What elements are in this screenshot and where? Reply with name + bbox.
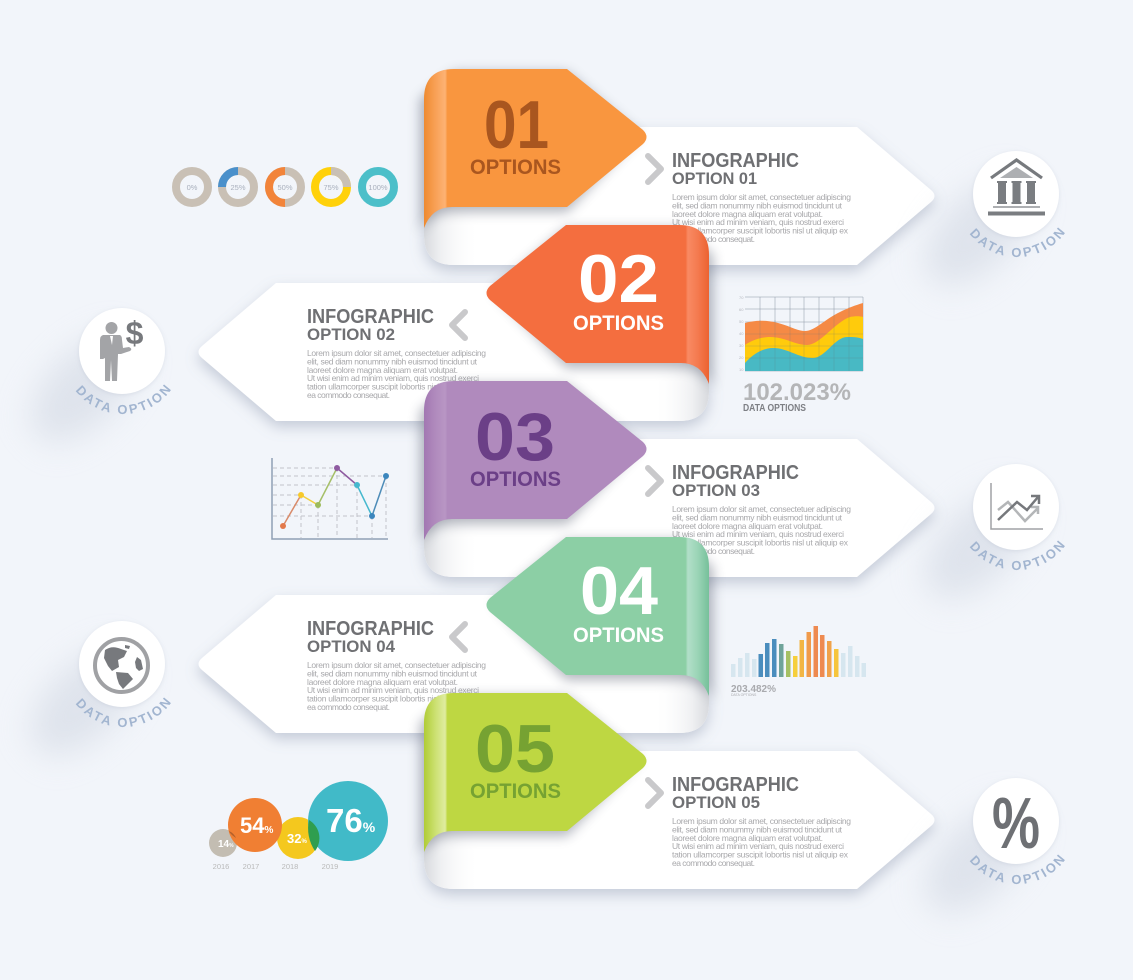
arrow body 01 (424, 127, 934, 265)
bubble label 76: 76% (326, 802, 376, 839)
step 03: arrow and tab (420, 381, 934, 577)
body text 01: laoreet dolore magna aliquam erat volutpat. (672, 209, 823, 219)
subheading 01: OPTION 01 (672, 169, 757, 188)
step 01: arrow and tab (420, 69, 934, 265)
icon: trend chart (991, 483, 1043, 529)
body text 03 (672, 504, 851, 556)
grid overlay (745, 307, 863, 371)
chevron 05 (648, 780, 661, 806)
body text 03: laoreet dolore magna aliquam erat volutpat. (672, 521, 823, 531)
body text 04: Ut wisi enim ad minim veniam, quis nostrud exerci (307, 685, 479, 695)
arrow body 03 (424, 439, 934, 577)
chevron 02 (452, 312, 465, 338)
bubble label 54: 54% (240, 813, 273, 838)
line chart points (280, 465, 389, 529)
heading 04: INFOGRAPHIC (307, 618, 434, 640)
subheading 05: OPTION 05 (672, 793, 760, 812)
body text 04: tation ullamcorper suscipit lobortis nisl ut aliquip ex (307, 694, 484, 704)
body text 01: Ut wisi enim ad minim veniam, quis nostrud exerci (672, 217, 844, 227)
bar chart caption: DATA OPTIONS (731, 693, 757, 697)
bars (731, 626, 866, 677)
body text 02: laoreet dolore magna aliquam erat volutpat. (307, 365, 458, 375)
area chart axis numbers: 10 (739, 367, 744, 372)
label: data option: DATA OPTION (76, 698, 171, 728)
body text 05: laoreet dolore magna aliquam erat volutpat. (672, 833, 823, 843)
step 04: arrow and tab (198, 537, 713, 733)
heading 05: INFOGRAPHIC (672, 774, 799, 796)
icon: businessman with dollar (100, 315, 144, 381)
area series orange (745, 303, 863, 371)
line chart axes (272, 458, 388, 539)
body text 03: Lorem ipsum dolor sit amet, consectetuer adipiscing (672, 504, 851, 514)
body text 04 (307, 660, 486, 712)
donut 50%: 50% (277, 183, 293, 192)
step 05: arrow and tab (420, 693, 934, 889)
body text 05: elit, sed diam nonummy nibh euismod tincidunt ut (672, 824, 843, 834)
body text 01: tation ullamcorper suscipit lobortis nisl ut aliquip ex (672, 226, 849, 236)
area chart axis numbers: 70 (739, 295, 744, 300)
bubble 32% (277, 817, 319, 859)
area chart axis numbers (739, 295, 744, 372)
tab label 01: OPTIONS (470, 155, 561, 179)
donut 100%: 100% (368, 183, 388, 192)
number 01: 01 (484, 87, 549, 163)
body text 03: ea commodo consequat. (672, 546, 755, 556)
donut 75% (315, 167, 351, 203)
heading 02: INFOGRAPHIC (307, 306, 434, 328)
donut 50% (265, 167, 301, 207)
area chart caption: DATA OPTIONS (743, 403, 806, 414)
body text 03: Ut wisi enim ad minim veniam, quis nostrud exerci (672, 529, 844, 539)
arrow body 02 (198, 283, 709, 421)
chevron 03 (648, 468, 661, 494)
body text 01: ea commodo consequat. (672, 234, 755, 244)
icon badge: globe (30, 621, 171, 756)
tab 05 (420, 693, 646, 889)
line chart (272, 458, 389, 539)
body text 02: tation ullamcorper suscipit lobortis nisl ut aliquip ex (307, 382, 484, 392)
body text 02: ea commodo consequat. (307, 390, 390, 400)
body text 05 (672, 816, 851, 868)
chevron 01 (648, 156, 661, 182)
label: data option: DATA OPTION (970, 540, 1065, 570)
line chart series (283, 468, 386, 526)
arrow body 05 (424, 751, 934, 889)
donut 100% (362, 171, 394, 203)
donut 0%: 0% (187, 183, 198, 192)
body text 04: elit, sed diam nonummy nibh euismod tincidunt ut (307, 668, 478, 678)
body text 05: ea commodo consequat. (672, 858, 755, 868)
body text 04: laoreet dolore magna aliquam erat volutpat. (307, 677, 458, 687)
body text 02 (307, 348, 486, 400)
number 03: 03 (475, 399, 555, 475)
bubble label 32: 32% (287, 831, 307, 846)
bubble years: 2018 (282, 862, 298, 871)
body text 01: Lorem ipsum dolor sit amet, consectetuer adipiscing (672, 192, 851, 202)
body text 02: elit, sed diam nonummy nibh euismod tincidunt ut (307, 356, 478, 366)
bubble years: 2017 (243, 862, 259, 871)
area chart axis numbers: 20 (739, 355, 744, 360)
area series teal (745, 337, 863, 371)
icon: percent: % (992, 784, 1040, 864)
area chart value: 102.023% (743, 379, 851, 406)
area series yellow (745, 316, 863, 371)
label: data option: DATA OPTION (970, 228, 1065, 258)
number 05: 05 (475, 711, 555, 787)
label: data option: DATA OPTION (76, 384, 171, 414)
body text 02: Lorem ipsum dolor sit amet, consectetuer adipiscing (307, 348, 486, 358)
body text 03: tation ullamcorper suscipit lobortis nisl ut aliquip ex (672, 538, 849, 548)
arrow body 04 (198, 595, 709, 733)
area chart axis numbers: 60 (739, 307, 744, 312)
label: data option: DATA OPTION (970, 854, 1065, 884)
donut progress row (176, 167, 394, 207)
overlap 54 and 14 (229, 831, 236, 838)
heading 01: INFOGRAPHIC (672, 150, 799, 172)
donut 75%: 75% (323, 183, 339, 192)
area chart axis numbers: 50 (739, 319, 744, 324)
bubble years (213, 862, 338, 871)
tab label 02: OPTIONS (573, 311, 664, 335)
bar chart value: 203.482% (731, 683, 777, 695)
icon badge: percent (924, 778, 1065, 912)
icon badge: businessman (30, 308, 171, 442)
icon badge: chart (924, 464, 1065, 598)
icon badge: bank (924, 151, 1065, 286)
bubble 76% (308, 781, 388, 861)
area chart grid (745, 297, 863, 371)
subheading 04: OPTION 04 (307, 637, 396, 656)
body text 01 (672, 192, 851, 244)
donut 25% (218, 167, 254, 203)
tab 02 (486, 225, 713, 421)
bar chart panel (731, 626, 866, 697)
area chart axis numbers: 30 (739, 343, 744, 348)
line chart gridlines (273, 468, 386, 538)
tab 03 (420, 381, 646, 577)
bubble label 14: 14% (218, 839, 234, 850)
heading 03: INFOGRAPHIC (672, 462, 799, 484)
donut 0% (176, 171, 208, 203)
chevron 04 (452, 624, 465, 650)
tab label 03: OPTIONS (470, 467, 561, 491)
donut 25%: 25% (230, 183, 246, 192)
tab label 04: OPTIONS (573, 623, 664, 647)
overlap 76 and 32 (308, 820, 319, 851)
tab 01 (420, 69, 646, 265)
body text 05: tation ullamcorper suscipit lobortis nisl ut aliquip ex (672, 850, 849, 860)
body text 02: Ut wisi enim ad minim veniam, quis nostrud exerci (307, 373, 479, 383)
body text 04: Lorem ipsum dolor sit amet, consectetuer adipiscing (307, 660, 486, 670)
bubble 14% (209, 829, 237, 857)
tab 04 (486, 537, 713, 733)
area chart axis numbers: 40 (739, 331, 744, 336)
body text 01: elit, sed diam nonummy nibh euismod tincidunt ut (672, 200, 843, 210)
icon: bank (988, 160, 1045, 216)
step 02: arrow and tab (198, 225, 713, 421)
bubble years: 2016 (213, 862, 229, 871)
bubble chart (209, 781, 388, 871)
number 02: 02 (578, 241, 659, 317)
body text 05: Lorem ipsum dolor sit amet, consectetuer adipiscing (672, 816, 851, 826)
subheading 03: OPTION 03 (672, 481, 760, 500)
body text 04: ea commodo consequat. (307, 702, 390, 712)
bubble 54% (228, 798, 282, 852)
icon: globe (95, 639, 148, 692)
area chart panel (739, 295, 863, 414)
bubble years: 2019 (322, 862, 338, 871)
tab label 05: OPTIONS (470, 779, 561, 803)
body text 03: elit, sed diam nonummy nibh euismod tincidunt ut (672, 512, 843, 522)
icon: businessman with dollar: $ (126, 315, 144, 351)
subheading 02: OPTION 02 (307, 325, 395, 344)
number 04: 04 (580, 553, 658, 629)
body text 05: Ut wisi enim ad minim veniam, quis nostrud exerci (672, 841, 844, 851)
